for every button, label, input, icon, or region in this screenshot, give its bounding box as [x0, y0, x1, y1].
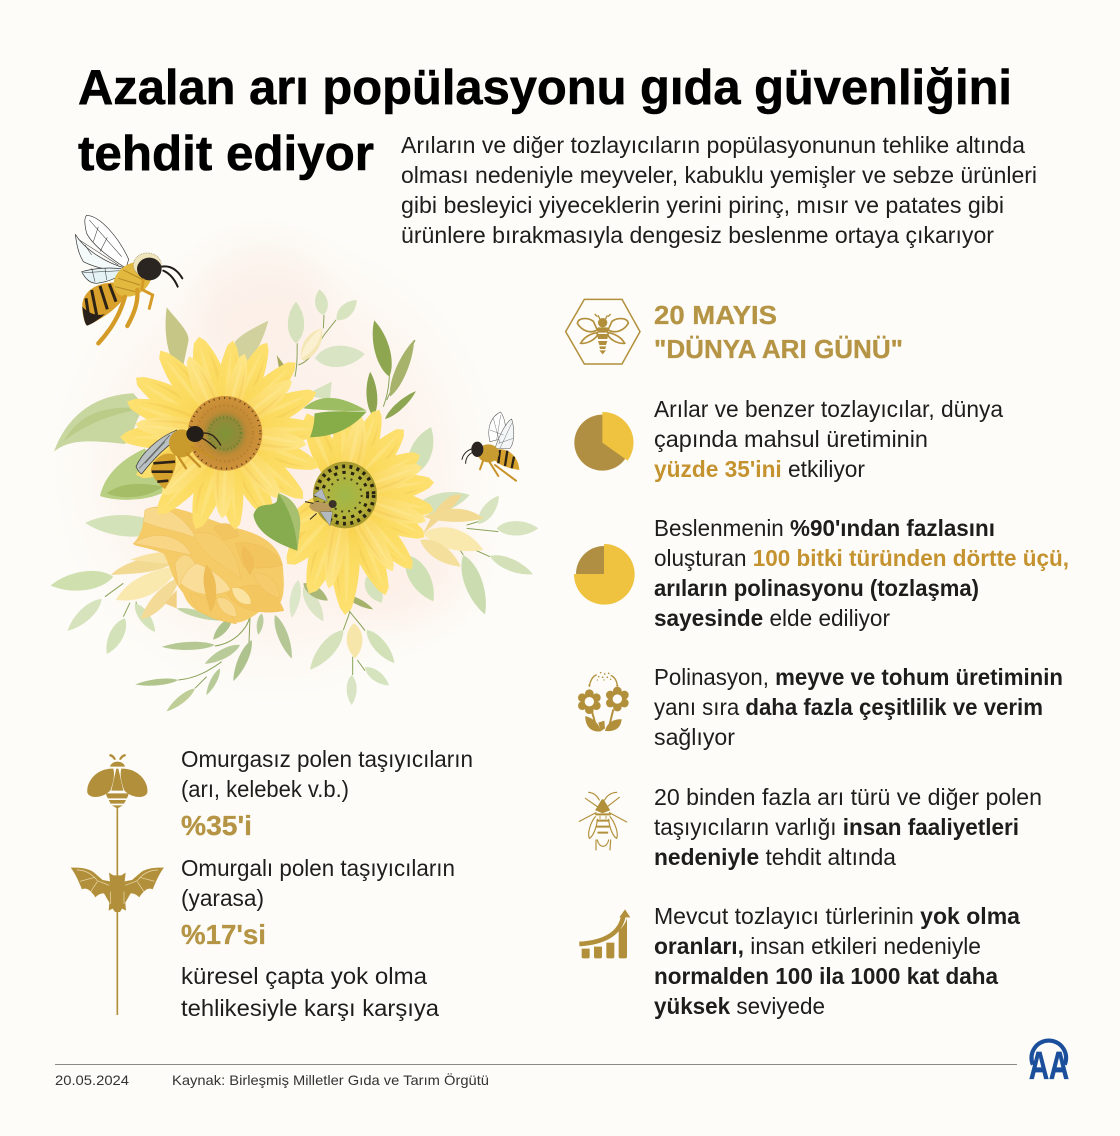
bee: flying top left: [75, 215, 182, 343]
heading: 20 Mayıs Dünya Arı Günü: "DÜNYA ARI GÜNÜ": [654, 334, 903, 364]
peony: [133, 507, 284, 624]
footer rule: [55, 1064, 1017, 1066]
footer date and source: 20.05.2024: [55, 1072, 129, 1088]
text: invertebrate pollinators: Omurgasız polen taşıyıcıların: [181, 746, 473, 772]
text: human threat: 20 binden fazla arı türü ve diğer polen: [654, 784, 1042, 810]
watercolor background: [50, 233, 503, 700]
heading: 20 Mayıs Dünya Arı Günü: 20 MAYIS: [654, 300, 777, 330]
text: extinction rates: Mevcut tozlayıcı türlerinin yok olma: [654, 903, 1020, 929]
footer date and source: Kaynak: Birleşmiş Milletler Gıda ve Tarım Örgütü: [172, 1071, 489, 1088]
illustration: sunflower bouquet with bees: [49, 215, 538, 714]
text: pollination benefits: [654, 664, 1063, 750]
text: vertebrate pollinators: [181, 855, 455, 950]
intro paragraph: Arıların ve diğer tozlayıcıların popülasyonunun tehlike altında: [401, 132, 1025, 158]
pale flower left: [111, 552, 183, 619]
text: extinction threat: tehlikesiyle karşı karşıya: [181, 995, 439, 1021]
text: extinction rates: oranları, insan etkileri nedeniyle: [654, 933, 981, 959]
text: human threat: nedeniyle tehdit altında: [654, 844, 896, 870]
text: invertebrate pollinators: %35'i: [181, 810, 252, 841]
pale flower right: [420, 495, 483, 567]
text: invertebrate pollinators: (arı, kelebek v.b.): [181, 776, 349, 802]
intro paragraph: ürünlere bırakmasıyla dengesiz beslenme ortaya çıkarıyor: [401, 222, 994, 248]
intro paragraph: [401, 132, 1037, 248]
text: pollination benefits: sağlıyor: [654, 724, 735, 750]
text: vertebrate pollinators: %17'si: [181, 919, 266, 950]
stems: [105, 315, 498, 688]
center green leaf: [253, 398, 367, 551]
text: extinction threat: küresel çapta yok olma: [181, 963, 427, 989]
text: nutrition share: [654, 515, 1069, 631]
logo: AA: AA: [1029, 1045, 1069, 1088]
text: crop production: Arılar ve benzer tozlayıcılar, dünya: [654, 396, 1003, 422]
text: vertebrate pollinators: (yarasa): [181, 885, 264, 911]
heading: 20 Mayıs Dünya Arı Günü: [654, 300, 903, 364]
timeline: bee and bat icons on vertical line: [71, 754, 164, 1015]
bee: on left sunflower: [136, 426, 221, 489]
sunflower right: [275, 405, 436, 615]
text: vertebrate pollinators: Omurgalı polen taşıyıcıların: [181, 855, 455, 881]
text: extinction rates: normalden 100 ila 1000 kat daha: [654, 963, 998, 989]
title: [78, 61, 1012, 181]
text: crop production: [654, 396, 1003, 482]
text: nutrition share: sayesinde elde ediliyor: [654, 605, 890, 631]
buds: [301, 328, 362, 658]
text: extinction rates: yüksek seviyede: [654, 993, 825, 1019]
text: extinction rates: [654, 903, 1020, 1019]
text: pollination benefits: yanı sıra daha fazla çeşitlilik ve verim: [654, 694, 1043, 720]
title: tehdit ediyor: [78, 127, 374, 181]
text: extinction threat: [181, 963, 439, 1021]
text: human threat: [654, 784, 1042, 870]
icon: bee silhouette: [87, 754, 147, 809]
text: human threat: taşıyıcıların varlığı insan faaliyetleri: [654, 814, 1019, 840]
footer date and source: [55, 1071, 489, 1088]
logo: AA: [1029, 1041, 1069, 1088]
sunflower left: [120, 333, 323, 533]
text: crop production: çapında mahsul üretiminin: [654, 426, 928, 452]
icon: flowers with pollen: [578, 672, 629, 732]
text: invertebrate pollinators: [181, 746, 473, 841]
icon: pie chart three quarters: [574, 544, 635, 605]
icon: wasp: [579, 792, 627, 850]
bee: flying right: [462, 412, 519, 481]
text: nutrition share: oluşturan 100 bitki türünden dörtte üçü,: [654, 545, 1069, 571]
title: Azalan arı popülasyonu gıda güvenliğini: [78, 61, 1012, 115]
intro paragraph: olması nedeniyle meyveler, kabuklu yemişler ve sebze ürünleri: [401, 162, 1037, 188]
text: nutrition share: arıların polinasyonu (tozlaşma): [654, 575, 979, 601]
bee: small on right sunflower: [305, 488, 337, 526]
icon: bat silhouette: [71, 868, 164, 912]
text: pollination benefits: Polinasyon, meyve ve tohum üretiminin: [654, 664, 1063, 690]
icon: pie chart 35 percent: [574, 412, 634, 471]
leaves: [49, 288, 538, 714]
intro paragraph: gibi besleyici yiyeceklerin yerini pirinç, mısır ve patates gibi: [401, 192, 1004, 218]
icon: rising bar chart: [579, 909, 630, 958]
text: nutrition share: Beslenmenin %90'ından fazlasını: [654, 515, 995, 541]
text: crop production: yüzde 35'ini etkiliyor: [654, 456, 865, 482]
icon: hexagon bee badge: [566, 299, 640, 364]
